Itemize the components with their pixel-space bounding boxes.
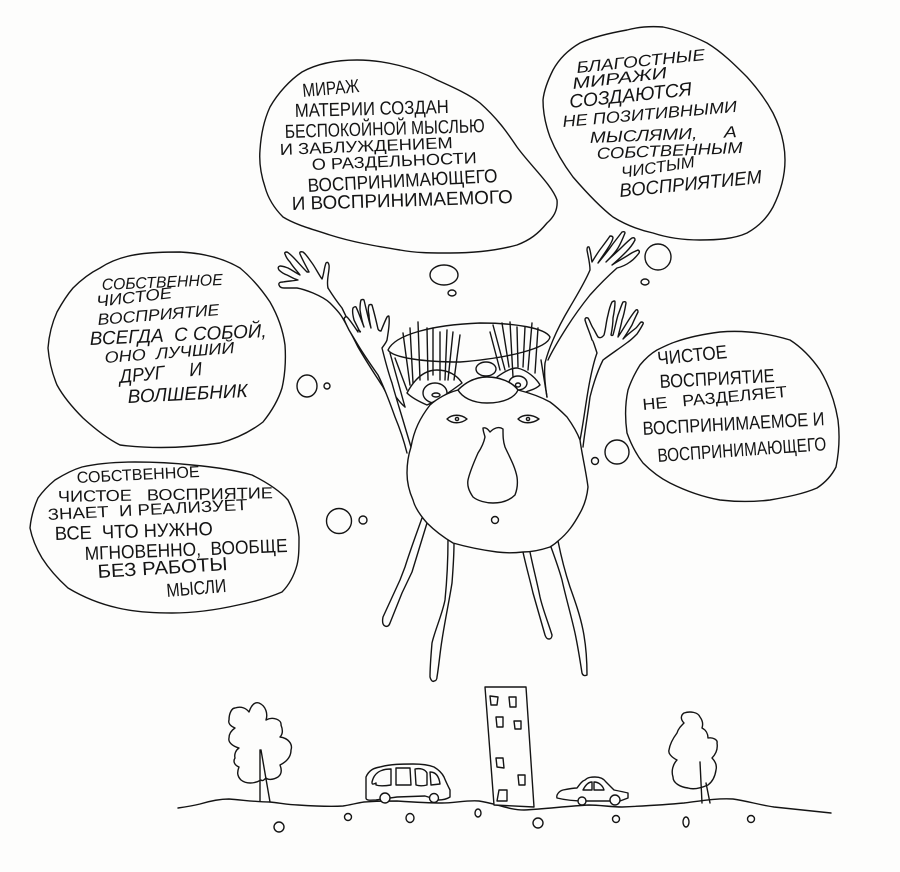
text: does not divide perceived and perceiver: ВОСПРИНИМАЕМОЕ И — [642, 409, 825, 440]
text: mirage of matter: МИРАЖ — [302, 76, 361, 102]
icon: car — [557, 777, 628, 805]
text: does not divide perceived and perceiver: ЧИСТОЕ — [656, 342, 728, 370]
panel: speech bubble about perception as best friend — [48, 252, 285, 447]
back head: hat ellipse and hair — [388, 322, 550, 407]
text: perception is always with you: ОНО ЛУЧШИЙ — [104, 338, 236, 367]
landscape: ground line — [178, 799, 831, 813]
arm: upper right with hand — [545, 232, 639, 397]
text: mirage of matter: О РАЗДЕЛЬНОСТИ — [311, 150, 477, 174]
text: knows and realizes everything: СОБСТВЕННОЕ — [76, 464, 200, 487]
text: benevolent mirages: НЕ ПОЗИТИВНЫМИ — [562, 99, 738, 131]
text: mirage of matter: ВОСПРИНИМАЮЩЕГО — [307, 166, 498, 197]
text: benevolent mirages: БЛАГОСТНЫЕ — [576, 47, 706, 77]
arm: upper left with hand — [278, 252, 408, 448]
text: benevolent mirages: СОЗДАЮТСЯ — [568, 79, 693, 113]
text: perception is always with you: СОБСТВЕННОЕ — [101, 272, 223, 294]
thought bubbles: small circles leading to speech bubbles — [297, 244, 671, 534]
mouth — [492, 516, 498, 524]
text: does not divide perceived and perceiver — [642, 342, 827, 467]
text: knows and realizes everything: МЫСЛИ — [166, 576, 227, 602]
pebbles under the ground — [274, 809, 754, 832]
text: perception is always with you — [89, 272, 267, 408]
panel: speech bubble about knowing without thought — [30, 462, 299, 613]
panel: speech bubble about undivided perception — [626, 331, 839, 502]
text: mirage of matter: БЕСПОКОЙНОЙ МЫСЛЬЮ — [284, 115, 485, 143]
text: does not divide perceived and perceiver: ВОСПРИЯТИЕ — [659, 366, 775, 393]
body: round torso with face — [407, 377, 588, 553]
arm: lower left with hand — [344, 300, 411, 453]
text: does not divide perceived and perceiver: НЕ РАЗДЕЛЯЕТ — [642, 384, 788, 414]
text: mirage of matter: И ЗАБЛУЖДЕНИЕМ — [279, 135, 453, 159]
text: benevolent mirages — [562, 47, 763, 202]
text: knows and realizes everything: МГНОВЕННО, ВООБЩЕ — [84, 536, 288, 565]
hair bun — [458, 377, 518, 403]
text: perception is always with you: ЧИСТОЕ — [95, 285, 173, 311]
text: benevolent mirages: ВОСПРИЯТИЕМ — [618, 167, 763, 202]
text: mirage of matter: МАТЕРИИ СОЗДАН — [295, 97, 449, 122]
text: knows and realizes everything — [47, 464, 288, 602]
character: floating figure with raised arms — [278, 232, 643, 681]
legs — [383, 518, 587, 681]
icon: right tree — [669, 712, 717, 803]
nose — [468, 428, 517, 503]
text: perception is always with you: ВСЕГДА С СОБОЙ, — [89, 320, 267, 350]
text: knows and realizes everything: ЧИСТОЕ ВОСПРИЯТИЕ — [58, 485, 273, 506]
text: does not divide perceived and perceiver: ВОСПРИНИМАЮЩЕГО — [657, 434, 827, 467]
text: mirage of matter: И ВОСПРИНИМАЕМОГО — [291, 187, 513, 215]
panel: speech bubble about benevolent mirages — [543, 27, 785, 240]
eyes — [447, 415, 539, 423]
icon: left tree — [229, 703, 291, 802]
text: benevolent mirages: ЧИСТЫМ — [620, 154, 696, 182]
text: knows and realizes everything: ВСЕ ЧТО НУЖНО — [54, 519, 213, 545]
back head: large eyes — [407, 362, 540, 405]
icon: bus — [366, 764, 450, 803]
text: knows and realizes everything: ЗНАЕТ И РЕАЛИЗУЕТ — [47, 497, 248, 524]
text: benevolent mirages: МИРАЖИ — [571, 65, 669, 93]
panel: speech bubble about the mirage of matter — [260, 60, 557, 253]
text: mirage of matter — [279, 76, 513, 215]
text: benevolent mirages: МЫСЛЯМИ, А — [589, 124, 737, 147]
arm: lower right with hand — [580, 301, 643, 447]
text: perception is always with you: ВОСПРИЯТИЕ — [97, 302, 220, 329]
text: knows and realizes everything: БЕЗ РАБОТЫ — [97, 554, 228, 583]
text: perception is always with you: ВОЛШЕБНИК — [127, 381, 250, 408]
icon: tall building — [485, 687, 534, 807]
text: benevolent mirages: СОБСТВЕННЫМ — [596, 140, 744, 163]
text: perception is always with you: ДРУГ И — [117, 359, 203, 388]
